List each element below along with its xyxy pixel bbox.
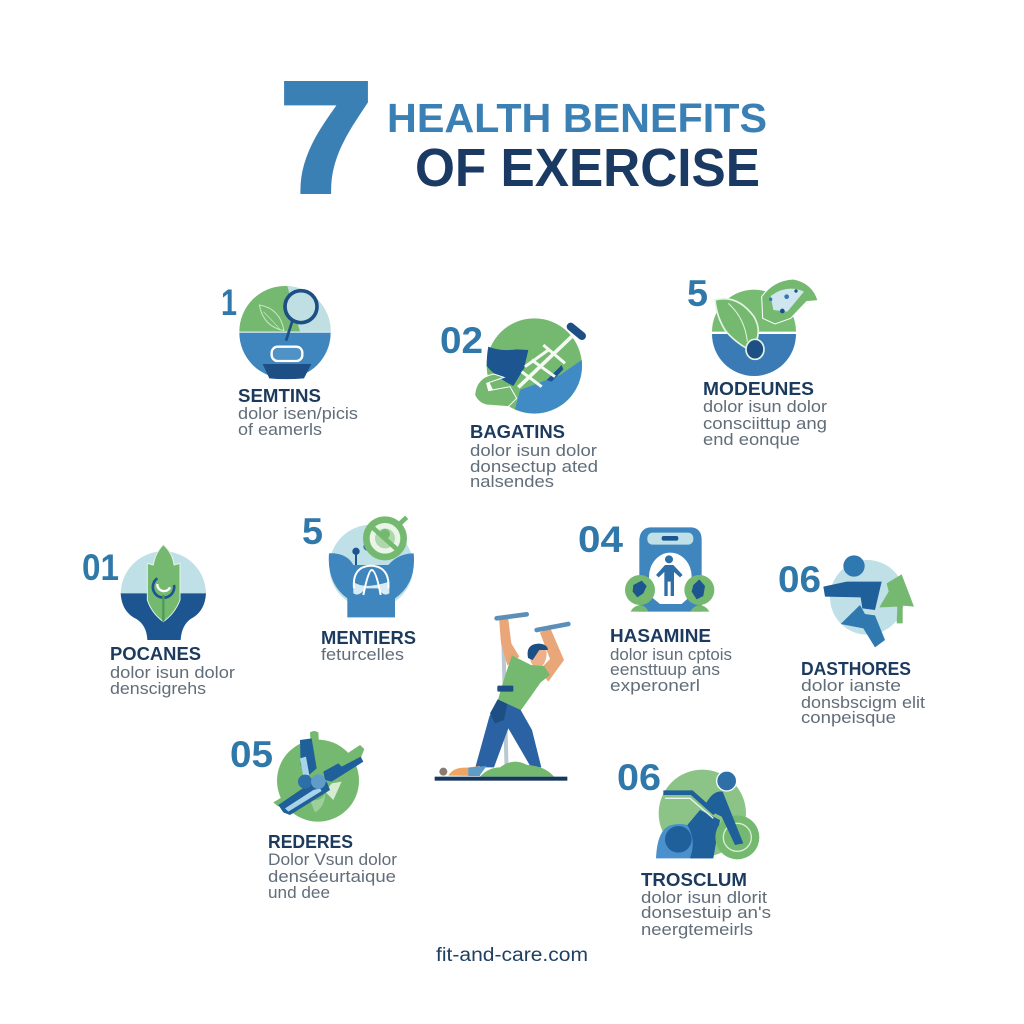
number 5: 5 (302, 511, 323, 552)
description: feturcelles (321, 645, 404, 664)
central figure: person exercising (435, 614, 568, 781)
heading: DASTHORES (801, 658, 911, 679)
resting figure (448, 766, 480, 776)
icon: cyclist (656, 770, 759, 859)
pants (475, 699, 541, 767)
description: experonerl (610, 676, 700, 695)
description: end eonque (703, 430, 800, 449)
description: donsectup ated (470, 457, 598, 476)
description: eensttuup ans (610, 660, 720, 679)
head (529, 644, 547, 668)
benefit: SEMTINS (221, 282, 358, 439)
number 04: 04 (578, 519, 623, 560)
heading: MENTIERS (321, 627, 416, 648)
right bar (537, 624, 568, 630)
heading: BAGATINS (470, 421, 565, 442)
footer url: fit-and-care.com (436, 945, 588, 966)
description: Dolor Vsun dolor (268, 850, 397, 869)
title line 1: HEALTH BENEFITS (387, 95, 767, 141)
description: dolor isen/picis (238, 404, 358, 423)
description: dolor isun dolor (470, 441, 597, 460)
resting figure head (439, 768, 447, 776)
description: of eamerls (238, 420, 322, 439)
number 05: 05 (230, 734, 273, 775)
icon: head and target (329, 517, 414, 617)
heading: REDERES (268, 831, 353, 852)
left bar (497, 614, 527, 618)
left arm (499, 617, 519, 665)
right arm (539, 627, 564, 682)
pole (501, 627, 509, 773)
heading: POCANES (110, 643, 201, 664)
icon: leaf shield (121, 545, 206, 640)
title line 2: OF EXERCISE (415, 138, 760, 198)
description: denséeurtaique (268, 867, 396, 886)
icon: joint and bars (273, 731, 364, 822)
description: dolor isun cptois (610, 645, 732, 664)
description: neergtemeirls (641, 920, 753, 939)
title block (281, 52, 767, 224)
number 01: 01 (82, 547, 119, 588)
ground mound (480, 762, 554, 777)
torso (498, 655, 550, 711)
benefit: POCANES (82, 545, 235, 698)
benefit: DASTHORES (778, 555, 925, 727)
heading: TROSCLUM (641, 869, 747, 890)
title numeral 7: 7 (281, 52, 371, 224)
icon: runner and tree (823, 555, 914, 647)
benefit: MODEUNES (687, 273, 827, 449)
icon: leaf and capsule (712, 279, 818, 376)
benefit: HASAMINE (578, 519, 732, 695)
icon: device with person (625, 527, 714, 612)
number 06: 06 (778, 559, 821, 600)
heading: HASAMINE (610, 625, 711, 646)
description: dolor isun dolor (110, 663, 235, 682)
benefit: TROSCLUM (617, 757, 771, 939)
number 5: 5 (687, 273, 708, 314)
description: und dee (268, 883, 330, 902)
icon: leaf and magnifier (239, 286, 331, 379)
heading: MODEUNES (703, 378, 814, 399)
number 02: 02 (440, 320, 483, 361)
benefit: MENTIERS (302, 511, 416, 664)
description: donsestuip an's (641, 903, 771, 922)
number 1: 1 (221, 282, 237, 323)
benefit: BAGATINS (440, 318, 598, 491)
description: nalsendes (470, 472, 554, 491)
description: consciittup ang (703, 414, 827, 433)
benefit: REDERES (230, 731, 397, 902)
number 06: 06 (617, 757, 661, 798)
hair (528, 644, 548, 660)
heading: SEMTINS (238, 385, 321, 406)
description: dolor ianste (801, 676, 901, 695)
description: conpeisque (801, 708, 896, 727)
ground bar (435, 777, 567, 781)
hip shadow (490, 699, 507, 723)
description: donsbscigm elit (801, 693, 925, 712)
description: dolor isun dlorit (641, 888, 767, 907)
description: denscigrehs (110, 679, 206, 698)
weight (497, 686, 513, 692)
icon: lattice and wrench (475, 318, 582, 414)
resting figure legs (468, 766, 487, 776)
description: dolor isun dolor (703, 397, 827, 416)
